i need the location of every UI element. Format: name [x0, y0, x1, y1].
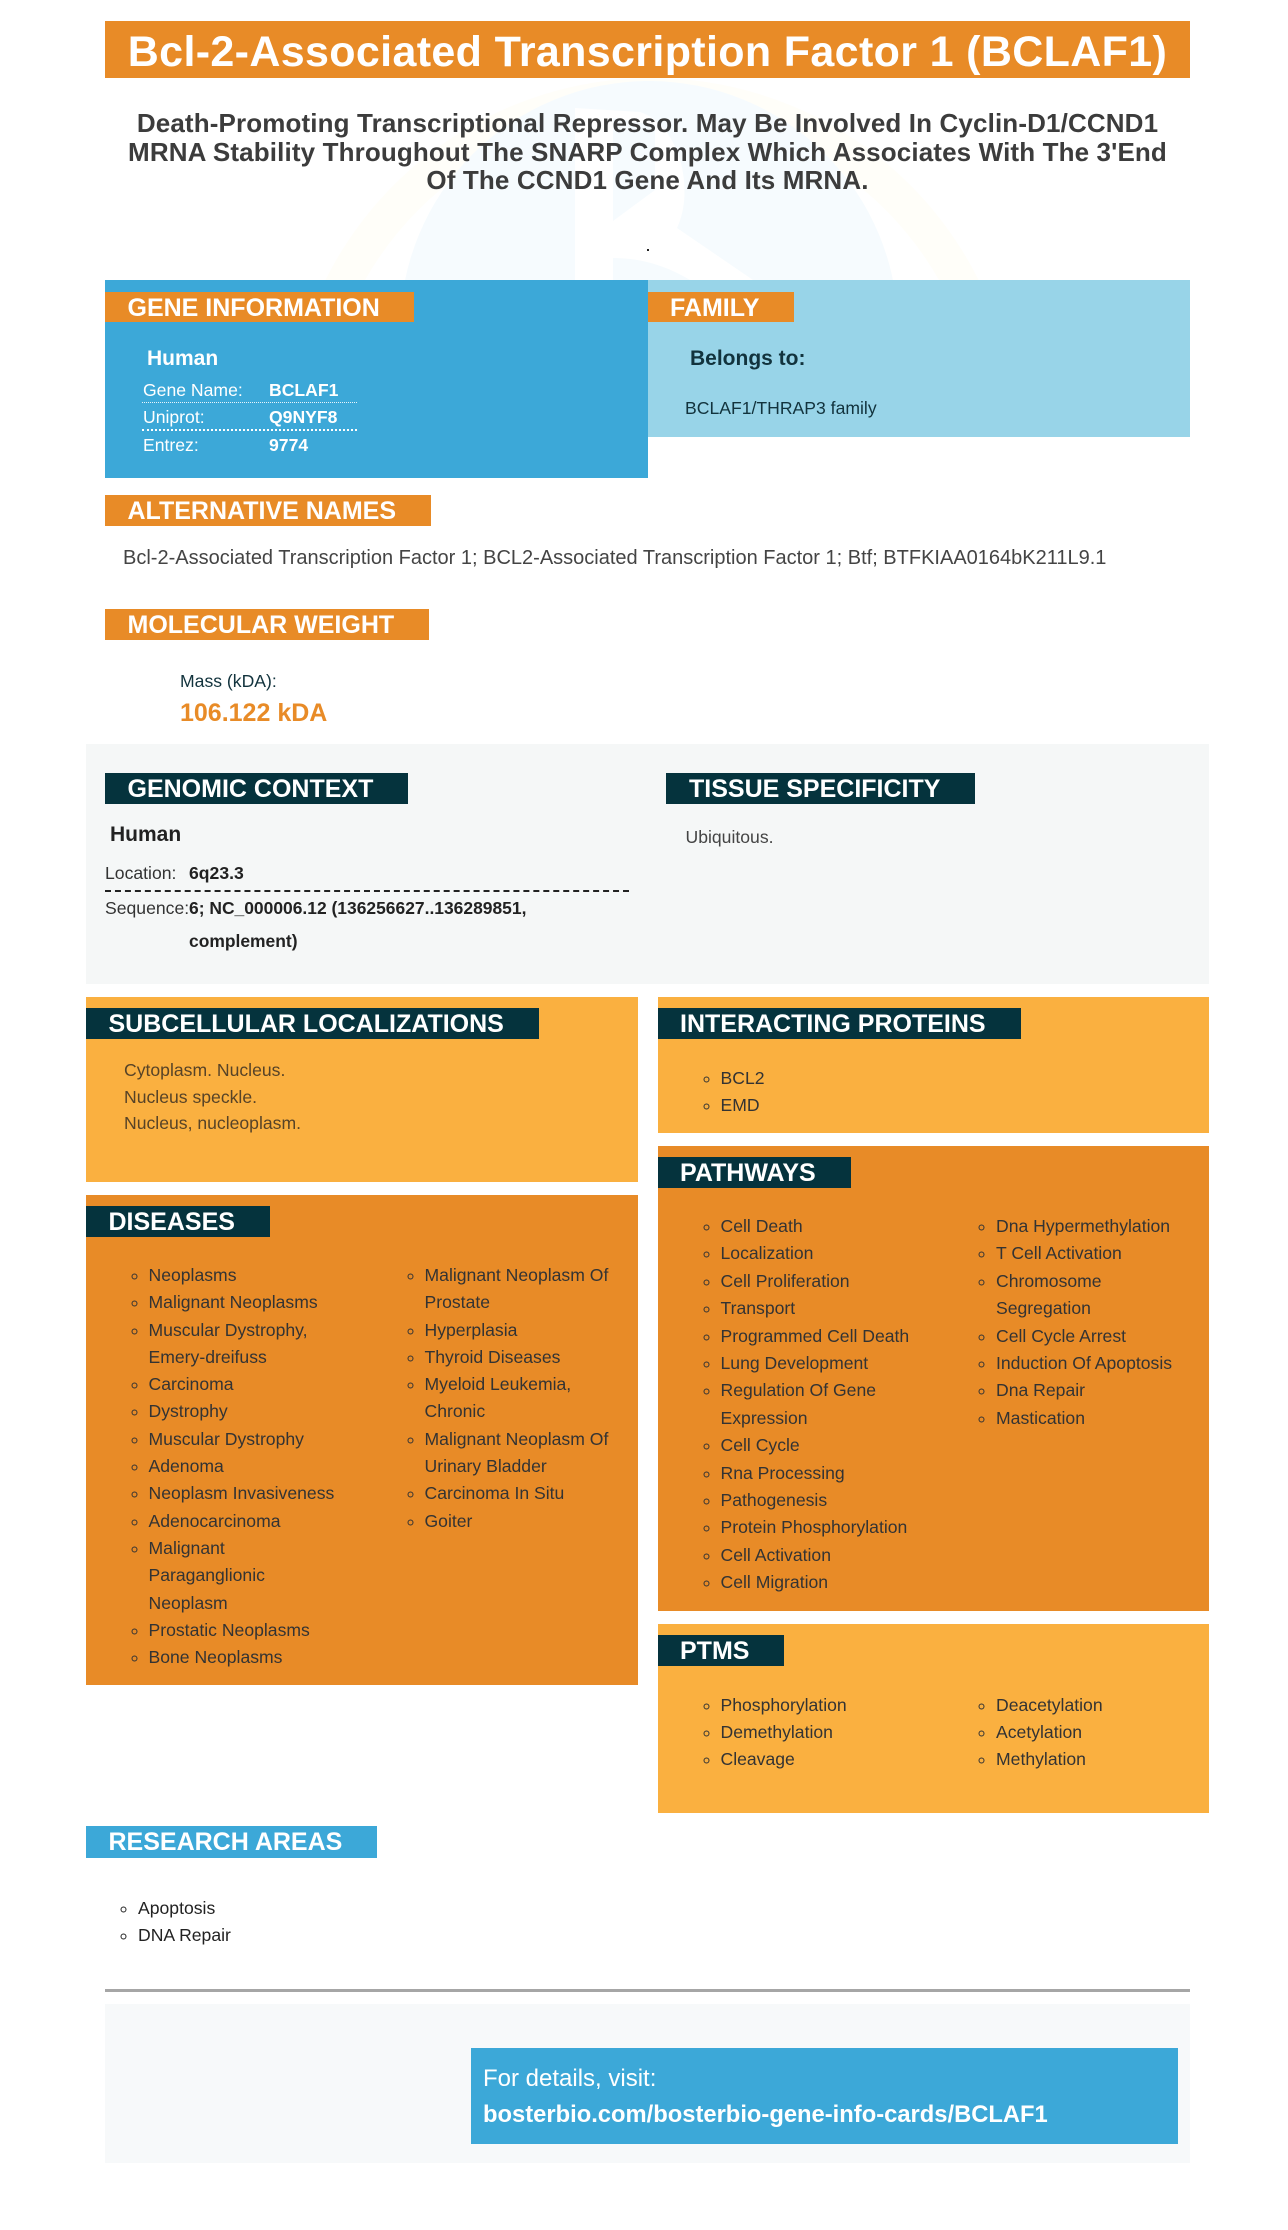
sequence value: complement)	[189, 931, 298, 951]
diseases list column 1: Adenoma	[148, 1456, 224, 1476]
pathways list column 1: Programmed Cell Death	[720, 1326, 909, 1346]
ptms list column 1: Demethylation	[720, 1722, 833, 1742]
diseases list column 2: Prostate	[424, 1292, 490, 1312]
diseases list column 2: Thyroid Diseases	[424, 1347, 560, 1367]
diseases list column 1: Emery-dreifuss	[148, 1347, 267, 1367]
pathways list column 1: Pathogenesis	[720, 1490, 827, 1510]
panel: gene information	[105, 280, 648, 478]
diseases list column 1: Neoplasm	[148, 1593, 228, 1613]
localization text: Nucleus speckle.	[124, 1087, 257, 1107]
heading: interacting proteins: INTERACTING PROTEINS	[680, 1010, 986, 1038]
heading: pathways	[658, 1157, 851, 1188]
ptms list column 1: Cleavage	[720, 1749, 795, 1769]
small dot	[647, 249, 649, 251]
alternative names text: Bcl-2-Associated Transcription Factor 1; BCL2-Associated Transcription Factor 1; Btf; BTFKIAA0164bK211L9.1	[123, 546, 1106, 568]
diseases list column 2: Hyperplasia	[424, 1320, 517, 1340]
belongs to label: Belongs to:	[690, 347, 806, 370]
subtitle description: Of The CCND1 Gene And Its MRNA.	[426, 165, 869, 195]
pathways list column 1: Expression	[720, 1408, 808, 1428]
panel: gene information: BCLAF1	[269, 380, 338, 400]
heading: pathways: PATHWAYS	[680, 1159, 816, 1187]
diseases list column 1: Carcinoma	[148, 1374, 234, 1394]
diseases list column 2: Urinary Bladder	[424, 1456, 547, 1476]
location row	[105, 863, 244, 883]
panel: subcellular localizations	[86, 997, 638, 1182]
panel: genomic context and tissue specificity	[86, 744, 1209, 984]
entrez row	[143, 435, 308, 455]
pathways list column 1: Protein Phosphorylation	[720, 1517, 907, 1537]
heading: family	[648, 292, 794, 322]
ptms list column 2: Methylation	[996, 1749, 1086, 1769]
heading: diseases: DISEASES	[108, 1208, 235, 1236]
research areas list: DNA Repair	[138, 1925, 231, 1945]
location row: Location:	[105, 863, 176, 883]
panel: gene information: 9774	[269, 435, 308, 455]
panel: family	[648, 280, 1190, 437]
interacting proteins list	[704, 1068, 765, 1115]
diseases list column 2: Malignant Neoplasm Of	[424, 1265, 608, 1285]
pathways list column 1: Regulation Of Gene	[720, 1380, 876, 1400]
species label: Human	[147, 347, 218, 370]
research areas list	[120, 1898, 231, 1945]
callout url: bosterbio.com/bosterbio-gene-info-cards/BCLAF1	[483, 2101, 1048, 2128]
ptms list column 1: Phosphorylation	[720, 1694, 847, 1714]
panel: gene information: Q9NYF8	[269, 407, 337, 427]
panel: footer	[105, 2004, 1190, 2163]
uniprot row	[143, 407, 337, 427]
diseases list column 2: Malignant Neoplasm Of	[424, 1429, 608, 1449]
subtitle description: Death-Promoting Transcriptional Repressor. May Be Involved In Cyclin-D1/CCND1	[137, 108, 1158, 138]
diseases list column 1	[132, 1265, 334, 1667]
diseases list column 1: Dystrophy	[148, 1401, 228, 1421]
ptms list column 2: Deacetylation	[996, 1694, 1103, 1714]
callout: details link	[471, 2048, 1178, 2144]
diseases list column 1: Neoplasms	[148, 1265, 237, 1285]
diseases list column 2: Myeloid Leukemia,	[424, 1374, 571, 1394]
diseases list column 1: Prostatic Neoplasms	[148, 1620, 310, 1640]
heading: ptms	[658, 1635, 784, 1666]
pathways list column 2: Cell Cycle Arrest	[996, 1326, 1126, 1346]
panel: diseases	[86, 1195, 638, 1685]
pathways list column 1: Cell Migration	[720, 1572, 828, 1592]
pathways list column 2: Dna Hypermethylation	[996, 1216, 1170, 1236]
heading: ptms: PTMS	[680, 1637, 749, 1665]
heading: tissue specificity: TISSUE SPECIFICITY	[689, 775, 940, 803]
pathways list column 1: Localization	[720, 1243, 813, 1263]
heading: diseases	[86, 1206, 270, 1237]
ptms list column 2	[978, 1694, 1103, 1769]
gene name row	[143, 380, 338, 400]
diseases list column 2: Goiter	[424, 1511, 472, 1531]
diseases list column 2: Carcinoma In Situ	[424, 1483, 564, 1503]
subtitle description: MRNA Stability Throughout The SNARP Complex Which Associates With The 3'End	[128, 137, 1167, 167]
pathways list column 2: Mastication	[996, 1408, 1085, 1428]
diseases list column 2: Chronic	[424, 1401, 485, 1421]
research areas list: Apoptosis	[138, 1898, 215, 1918]
heading: gene information: GENE INFORMATION	[128, 294, 380, 322]
pathways list column 2: T Cell Activation	[996, 1243, 1122, 1263]
localization text: Cytoplasm. Nucleus.	[124, 1060, 285, 1080]
pathways list column 1	[704, 1216, 909, 1592]
family name: BCLAF1/THRAP3 family	[685, 398, 877, 418]
pathways list column 1: Cell Cycle	[720, 1435, 800, 1455]
title banner	[105, 21, 1190, 78]
pathways list column 2: Induction Of Apoptosis	[996, 1353, 1172, 1373]
panel: ptms	[658, 1624, 1209, 1813]
sequence row: Sequence:	[105, 898, 189, 918]
sequence value	[189, 898, 526, 951]
pathways list column 1: Rna Processing	[720, 1463, 845, 1483]
watermark logo	[406, 81, 892, 280]
diseases list column 1: Bone Neoplasms	[148, 1647, 282, 1667]
mass label: Mass (kDA):	[180, 671, 277, 691]
diseases list column 2	[408, 1265, 608, 1531]
pathways list column 1: Cell Activation	[720, 1545, 831, 1565]
localization text: Nucleus, nucleoplasm.	[124, 1113, 301, 1133]
species label: Human	[110, 823, 181, 846]
diseases list column 1: Adenocarcinoma	[148, 1511, 281, 1531]
title text: Bcl-2-Associated Transcription Factor 1 (BCLAF1)	[128, 28, 1167, 76]
diseases list column 1: Paraganglionic	[148, 1565, 265, 1585]
pathways list column 1: Cell Proliferation	[720, 1271, 850, 1291]
sequence value: 6; NC_000006.12 (136256627..136289851,	[189, 898, 526, 918]
subtitle description	[128, 108, 1167, 195]
interacting proteins list: EMD	[720, 1095, 760, 1115]
pathways list column 1: Lung Development	[720, 1353, 868, 1373]
heading: genomic context: GENOMIC CONTEXT	[128, 775, 373, 803]
diseases list column 1: Muscular Dystrophy	[148, 1429, 304, 1449]
panel: pathways	[658, 1146, 1209, 1611]
gene name row: Gene Name:	[143, 380, 243, 400]
pathways list column 1: Transport	[720, 1298, 795, 1318]
pathways list column 2	[978, 1216, 1172, 1428]
tissue text: Ubiquitous.	[686, 827, 774, 847]
panel: genomic context and tissue specificity: 6q23.3	[189, 863, 244, 883]
pathways list column 2: Chromosome	[996, 1271, 1102, 1291]
diseases list column 1: Malignant	[148, 1538, 225, 1558]
heading: research areas: RESEARCH AREAS	[108, 1828, 342, 1856]
diseases list column 1: Muscular Dystrophy,	[148, 1320, 308, 1340]
uniprot row: Uniprot:	[143, 407, 205, 427]
diseases list column 1: Malignant Neoplasms	[148, 1292, 318, 1312]
callout label: For details, visit:	[483, 2065, 656, 2092]
diseases list column 1: Neoplasm Invasiveness	[148, 1483, 334, 1503]
ptms list column 2: Acetylation	[996, 1722, 1082, 1742]
ptms list column 1	[704, 1694, 847, 1769]
heading: alternative names: ALTERNATIVE NAMES	[128, 497, 396, 525]
heading: family: FAMILY	[670, 294, 759, 322]
pathways list column 1: Cell Death	[720, 1216, 803, 1236]
interacting proteins list: BCL2	[720, 1068, 765, 1088]
mass value: 106.122 kDA	[180, 699, 327, 727]
panel: interacting proteins	[658, 997, 1209, 1133]
heading: molecular weight: MOLECULAR WEIGHT	[128, 611, 394, 639]
localization text	[124, 1060, 301, 1133]
entrez row: Entrez:	[143, 435, 199, 455]
pathways list column 2: Segregation	[996, 1298, 1091, 1318]
heading: subcellular localizations: SUBCELLULAR LOCALIZATIONS	[108, 1010, 504, 1038]
pathways list column 2: Dna Repair	[996, 1380, 1085, 1400]
